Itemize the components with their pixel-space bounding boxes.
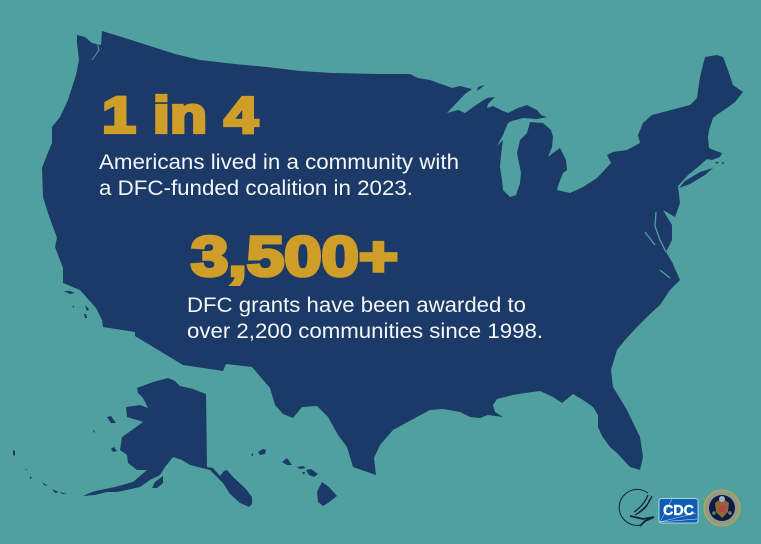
stat description: over 2,200 communities since 1998. — [187, 320, 543, 343]
map: contiguous United States — [42, 31, 743, 475]
stat description: Americans lived in a community with — [99, 151, 459, 174]
logos — [619, 489, 740, 526]
Alaska islands — [13, 416, 163, 494]
logo: CDC: CDC — [663, 502, 694, 519]
detail: Channel Islands — [64, 291, 89, 318]
logo: HHS — [619, 489, 654, 526]
detail: Puget Sound inlets — [92, 34, 101, 60]
detail: Chesapeake Bay — [645, 212, 670, 278]
stat description: DFC grants have been awarded to — [187, 294, 526, 317]
detail: Nantucket and Martha's Vineyard — [715, 162, 725, 164]
logo: presidential seal — [704, 490, 740, 526]
stat description: a DFC-funded coalition in 2023. — [99, 177, 413, 200]
stat: 3,500+ — [187, 224, 543, 343]
map: Alaska — [13, 378, 252, 507]
detail: Long Island — [679, 168, 713, 188]
stat: 1 in 4 — [99, 86, 459, 200]
big number: 1 in 4 — [102, 86, 259, 144]
map: Hawaii — [251, 449, 337, 506]
big number: 3,500+ — [191, 224, 398, 288]
detail: Isle Royale — [477, 85, 485, 91]
